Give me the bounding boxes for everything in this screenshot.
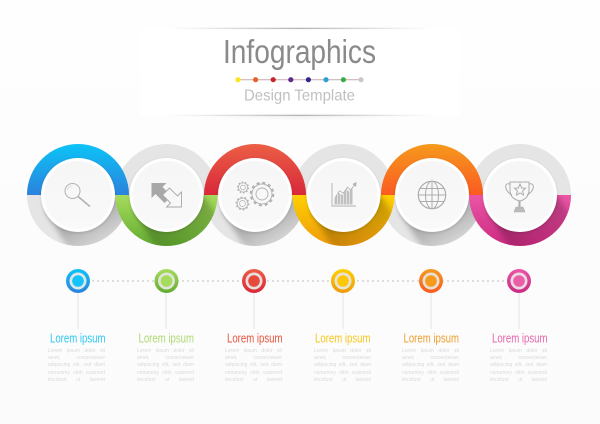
text block 6: adipiscing elit, sed diam [490, 362, 547, 368]
icon: growth chart [332, 182, 356, 206]
step 2 ring: arrows [116, 158, 218, 246]
heading 2: Lorem ipsum [138, 331, 194, 346]
icon: two-way arrows [152, 183, 182, 207]
text block 5 [402, 348, 459, 383]
marker 6 [507, 269, 531, 293]
text block 4: amet, consectetuer [314, 355, 371, 361]
heading 6: Lorem ipsum [492, 331, 548, 346]
text block 1: amet, consectetuer [48, 355, 105, 361]
heading 4: Lorem ipsum [315, 331, 370, 346]
text block 2: amet, consectetuer [137, 355, 194, 361]
text block 4: tincidunt ut laoreet [314, 377, 371, 383]
text block 1: adipiscing elit, sed diam [48, 362, 105, 368]
text block 6: Lorem ipsum dolor sit [490, 348, 547, 354]
text block 2 [137, 348, 194, 383]
text block 4: nonummy nibh euismod [314, 370, 371, 376]
marker 3 [242, 269, 266, 293]
text block 1: tincidunt ut laoreet [48, 377, 105, 383]
text block 5: adipiscing elit, sed diam [402, 362, 459, 368]
icon: globe [418, 181, 446, 209]
text block 2: Lorem ipsum dolor sit [137, 348, 194, 354]
text block 4: adipiscing elit, sed diam [314, 362, 371, 368]
step 5 ring: globe [381, 144, 483, 246]
text block 3: amet, consectetuer [225, 355, 282, 361]
text block 3 [225, 348, 282, 383]
marker 1 [66, 269, 90, 293]
text block 6 [490, 348, 547, 383]
text block 5: tincidunt ut laoreet [402, 377, 459, 383]
marker 4 [331, 269, 355, 293]
icon: gears [236, 182, 273, 210]
dotted timeline [92, 280, 507, 282]
step 4 ring: chart [292, 158, 394, 246]
heading 5: Lorem ipsum [404, 331, 459, 346]
text block 5: nonummy nibh euismod [402, 370, 459, 376]
grey backing rings [27, 144, 571, 246]
text block 1: Lorem ipsum dolor sit [48, 348, 105, 354]
infographic artwork [27, 28, 571, 345]
marker 2 [154, 269, 178, 293]
text block 4 [314, 348, 371, 383]
step 1 ring: search [27, 144, 129, 246]
connector lines [78, 293, 519, 329]
text block 3: adipiscing elit, sed diam [225, 362, 282, 368]
text block 6: amet, consectetuer [490, 355, 547, 361]
text block 4: Lorem ipsum dolor sit [314, 348, 371, 354]
text block 1 [48, 348, 105, 383]
text block 6: nonummy nibh euismod [490, 370, 547, 376]
text block 1: nonummy nibh euismod [48, 370, 105, 376]
text block 3: Lorem ipsum dolor sit [225, 348, 282, 354]
text block 2: adipiscing elit, sed diam [137, 362, 194, 368]
step 6 ring: trophy [469, 158, 571, 246]
heading 1: Lorem ipsum [50, 331, 106, 346]
text block 3: nonummy nibh euismod [225, 370, 282, 376]
icon: trophy [506, 182, 533, 212]
colour dots line [235, 77, 364, 82]
text block 5: amet, consectetuer [402, 355, 459, 361]
text block 6: tincidunt ut laoreet [490, 377, 547, 383]
text block 5: Lorem ipsum dolor sit [402, 348, 459, 354]
text block 2: nonummy nibh euismod [137, 370, 194, 376]
text block 3: tincidunt ut laoreet [225, 377, 282, 383]
title panel [140, 28, 460, 118]
text block 2: tincidunt ut laoreet [137, 377, 194, 383]
icon: magnifying glass [65, 184, 90, 206]
marker 5 [419, 269, 443, 293]
step 3 ring: gears [204, 144, 306, 246]
heading 3: Lorem ipsum [227, 331, 282, 346]
title: Infographics [223, 33, 376, 70]
subtitle: Design Template [244, 88, 355, 104]
